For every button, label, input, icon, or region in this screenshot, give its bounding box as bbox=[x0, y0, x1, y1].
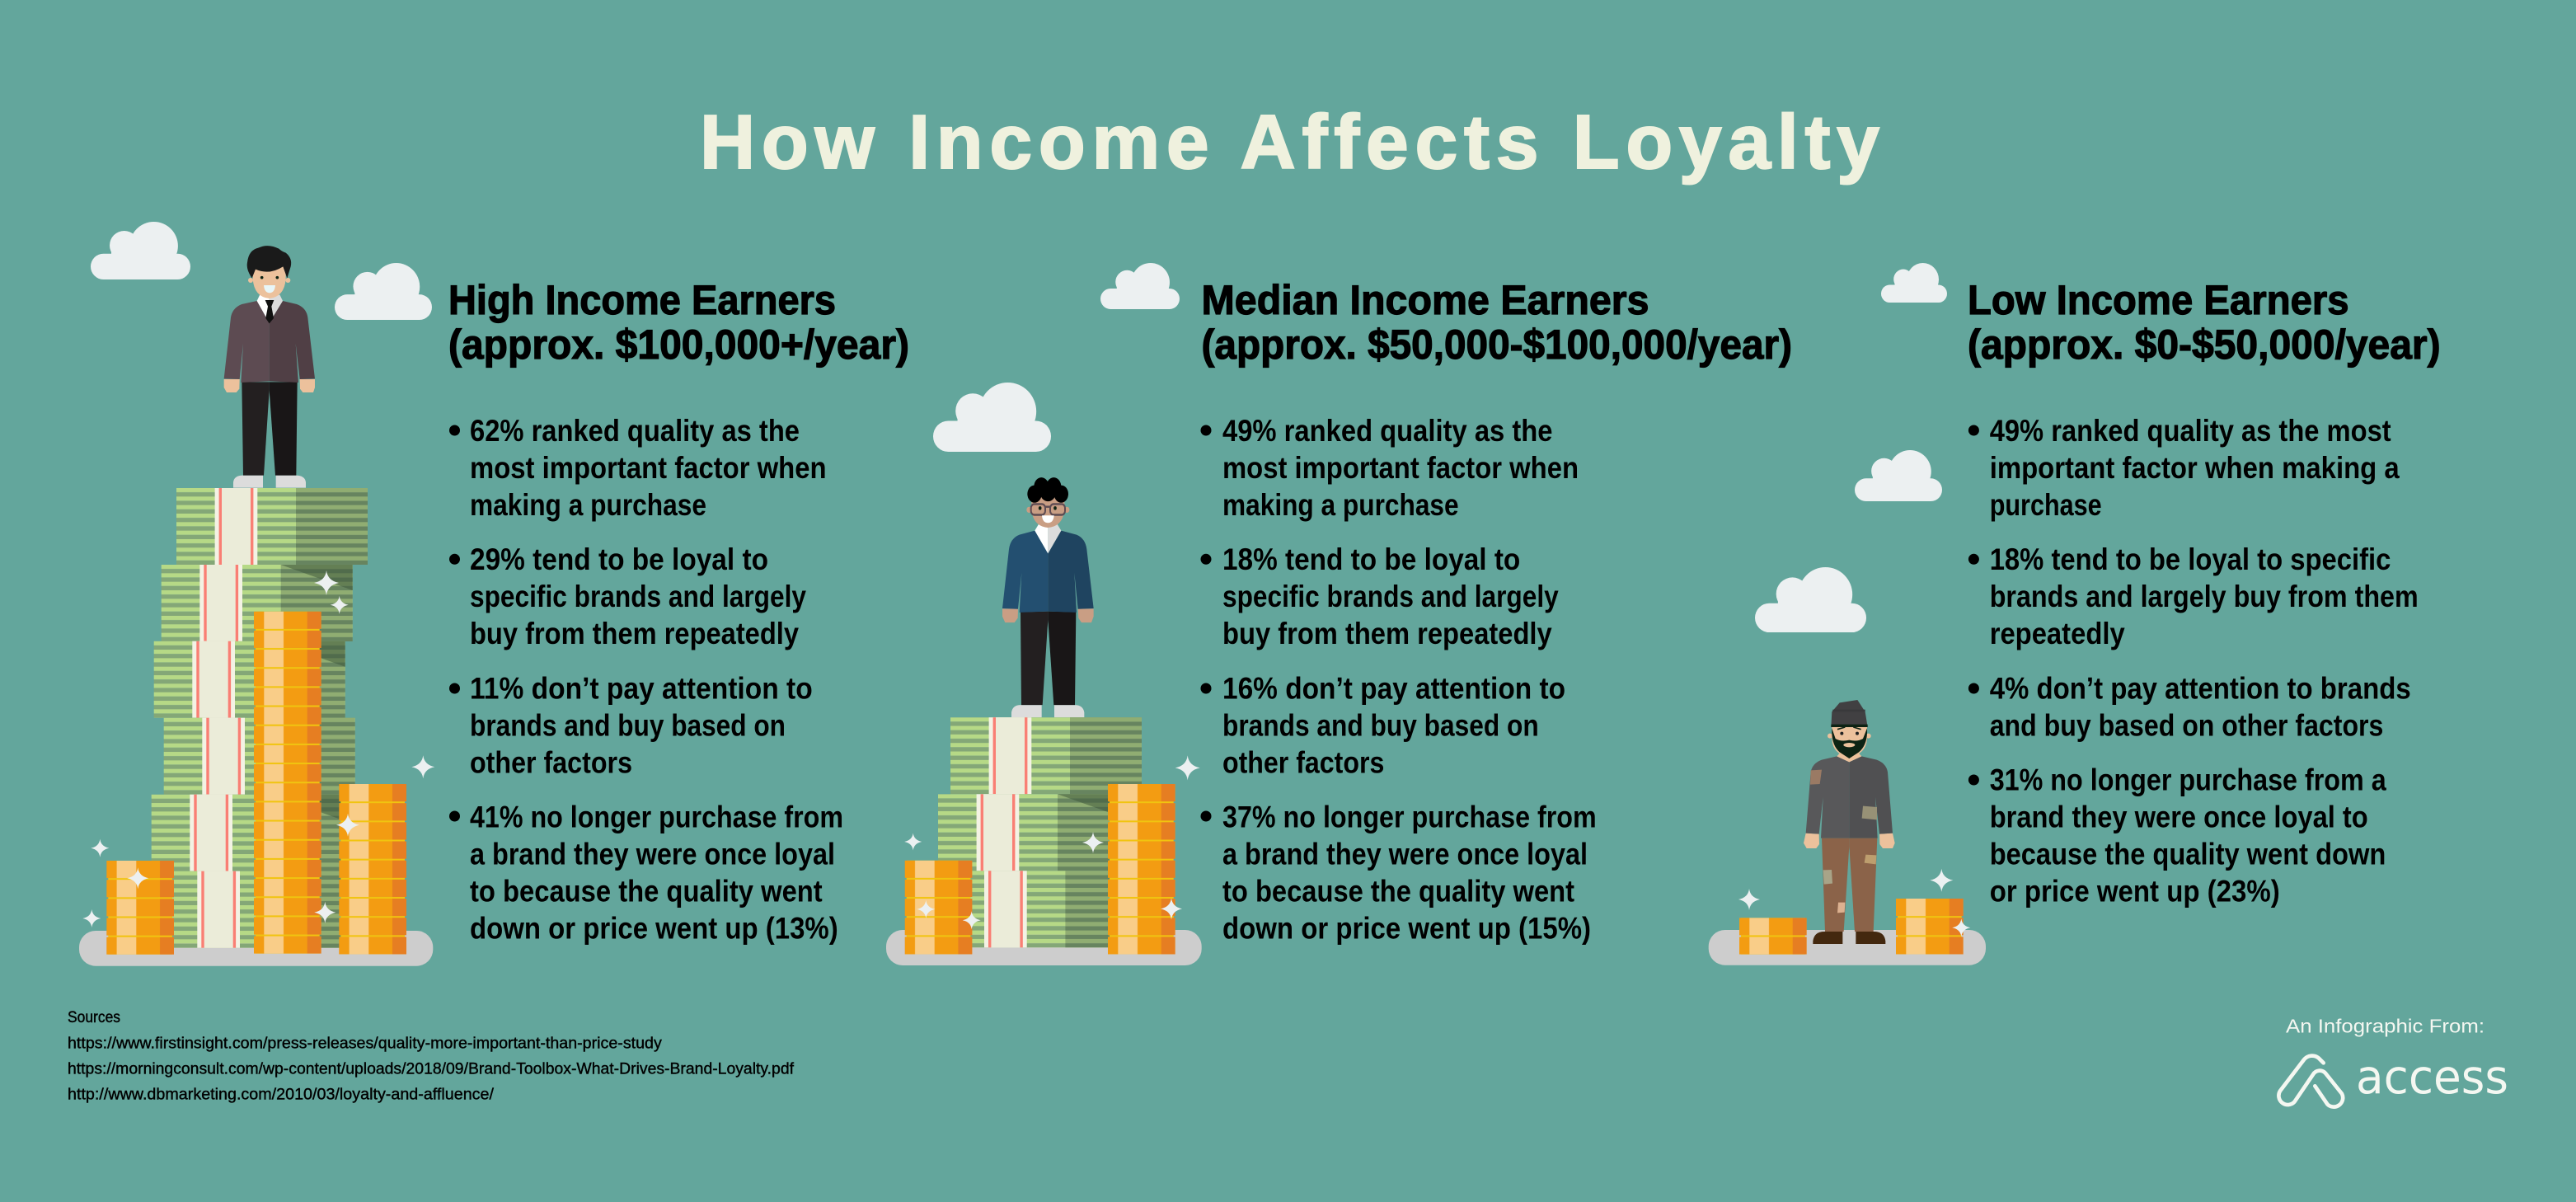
platform bbox=[79, 931, 433, 966]
bullet list: to because the quality went bbox=[1222, 874, 1574, 908]
coin stack right bbox=[1896, 899, 1964, 955]
bullet list: brands and buy based on bbox=[1222, 708, 1539, 742]
bullet list: specific brands and largely bbox=[470, 580, 806, 613]
bullet list: making a purchase bbox=[470, 488, 706, 522]
heading: (approx. $50,000-$100,000/year) bbox=[1202, 322, 1792, 368]
bullet list: 62% ranked quality as the bbox=[470, 414, 800, 448]
heading bbox=[1968, 277, 2441, 368]
heading: High Income Earners bbox=[448, 277, 836, 323]
bullet list: down or price went up (15%) bbox=[1222, 911, 1591, 945]
bullet list: 18% tend to be loyal to bbox=[1222, 542, 1520, 576]
cloud bbox=[91, 222, 190, 279]
bullet list: 16% don’t pay attention to bbox=[1222, 671, 1565, 705]
bullet list: most important factor when bbox=[470, 451, 827, 485]
bullet list: 4% don’t pay attention to brands bbox=[1990, 671, 2411, 705]
sources: https://morningconsult.com/wp-content/uploads/2018/09/Brand-Toolbox-What-Drives-Brand-Loyalty.pdf bbox=[68, 1059, 795, 1078]
cloud bbox=[1755, 567, 1866, 632]
bullet list: other factors bbox=[470, 745, 632, 779]
bullet list: 31% no longer purchase from a bbox=[1990, 763, 2386, 796]
money stacks bbox=[152, 488, 368, 948]
platform bbox=[1709, 930, 1986, 965]
coin stack left bbox=[106, 861, 174, 955]
sources: Sources bbox=[68, 1008, 120, 1026]
bullet list: buy from them repeatedly bbox=[470, 617, 799, 650]
money stacks bbox=[938, 717, 1142, 947]
bottom bill stack over platform bbox=[159, 871, 350, 948]
bullet list: down or price went up (13%) bbox=[470, 911, 838, 945]
coin stack center bbox=[254, 612, 321, 954]
platform bbox=[886, 930, 1202, 965]
panel: low income text bbox=[1968, 277, 2441, 908]
sparkles bbox=[82, 570, 434, 927]
bullet list: 49% ranked quality as the bbox=[1222, 414, 1553, 448]
panel: median income text bbox=[1200, 277, 1792, 945]
bullet list bbox=[1200, 414, 1597, 945]
bullet list bbox=[1968, 414, 2419, 908]
coin stack left bbox=[905, 861, 972, 955]
heading bbox=[1202, 277, 1792, 368]
bullet list: 41% no longer purchase from bbox=[470, 800, 843, 833]
credit line: An Infographic From: bbox=[2286, 1016, 2485, 1037]
title: How Income Affects Loyalty bbox=[700, 99, 1879, 185]
panel: high income illustration bbox=[79, 222, 434, 966]
panel: median income illustration bbox=[886, 263, 1202, 965]
icon: access mark bbox=[2278, 1056, 2343, 1107]
bullet list: a brand they were once loyal bbox=[470, 837, 835, 871]
person: man with glasses bbox=[1002, 477, 1094, 717]
sources: https://www.firstinsight.com/press-releases/quality-more-important-than-price-study bbox=[68, 1035, 662, 1053]
cloud bbox=[933, 383, 1051, 452]
branding: access logo bbox=[2278, 1016, 2508, 1107]
coin stack right bbox=[339, 784, 406, 955]
bullet list: 49% ranked quality as the most bbox=[1990, 414, 2391, 448]
heading bbox=[448, 277, 909, 368]
bullet list: because the quality went down bbox=[1990, 837, 2386, 871]
wordmark: access bbox=[2356, 1050, 2508, 1105]
panel: low income illustration bbox=[1709, 263, 1986, 965]
coin stack right bbox=[1108, 784, 1175, 955]
cloud bbox=[1100, 263, 1180, 309]
sources: http://www.dbmarketing.com/2010/03/loyalty-and-affluence/ bbox=[68, 1085, 495, 1103]
bullet list: to because the quality went bbox=[470, 874, 823, 908]
sparkles bbox=[1738, 869, 1970, 937]
bullet list: or price went up (23%) bbox=[1990, 874, 2280, 908]
heading: (approx. $100,000+/year) bbox=[448, 322, 909, 368]
bullet list: brands and buy based on bbox=[470, 708, 786, 742]
bullet list: a brand they were once loyal bbox=[1222, 837, 1588, 871]
bullet list: other factors bbox=[1222, 745, 1384, 779]
bullet list bbox=[449, 414, 843, 945]
heading: Low Income Earners bbox=[1968, 277, 2349, 323]
sources bbox=[68, 1008, 795, 1103]
cloud bbox=[335, 263, 432, 320]
heading: Median Income Earners bbox=[1202, 277, 1649, 323]
bullet list: important factor when making a bbox=[1990, 451, 2400, 485]
person: man in patched clothes bbox=[1804, 700, 1895, 944]
bullet list: buy from them repeatedly bbox=[1222, 617, 1552, 650]
cloud bbox=[1881, 263, 1947, 303]
sparkles bbox=[904, 755, 1200, 929]
coin stack left bbox=[1739, 918, 1807, 955]
cloud bbox=[1855, 450, 1942, 501]
bullet list: 11% don’t pay attention to bbox=[470, 671, 813, 705]
bullet list: and buy based on other factors bbox=[1990, 708, 2383, 742]
person: businessman bbox=[224, 246, 315, 488]
bullet list: 37% no longer purchase from bbox=[1222, 800, 1597, 833]
bullet list: 18% tend to be loyal to specific bbox=[1990, 542, 2391, 576]
bullet list: purchase bbox=[1990, 488, 2102, 522]
panel: high income text bbox=[448, 277, 909, 945]
heading: (approx. $0-$50,000/year) bbox=[1968, 322, 2441, 368]
bullet list: making a purchase bbox=[1222, 488, 1459, 522]
bullet list: most important factor when bbox=[1222, 451, 1579, 485]
bullet list: repeatedly bbox=[1990, 617, 2125, 650]
bullet list: 29% tend to be loyal to bbox=[470, 542, 768, 576]
bullet list: brand they were once loyal to bbox=[1990, 800, 2368, 833]
bullet list: specific brands and largely bbox=[1222, 580, 1559, 613]
bullet list: brands and largely buy from them bbox=[1990, 580, 2419, 613]
